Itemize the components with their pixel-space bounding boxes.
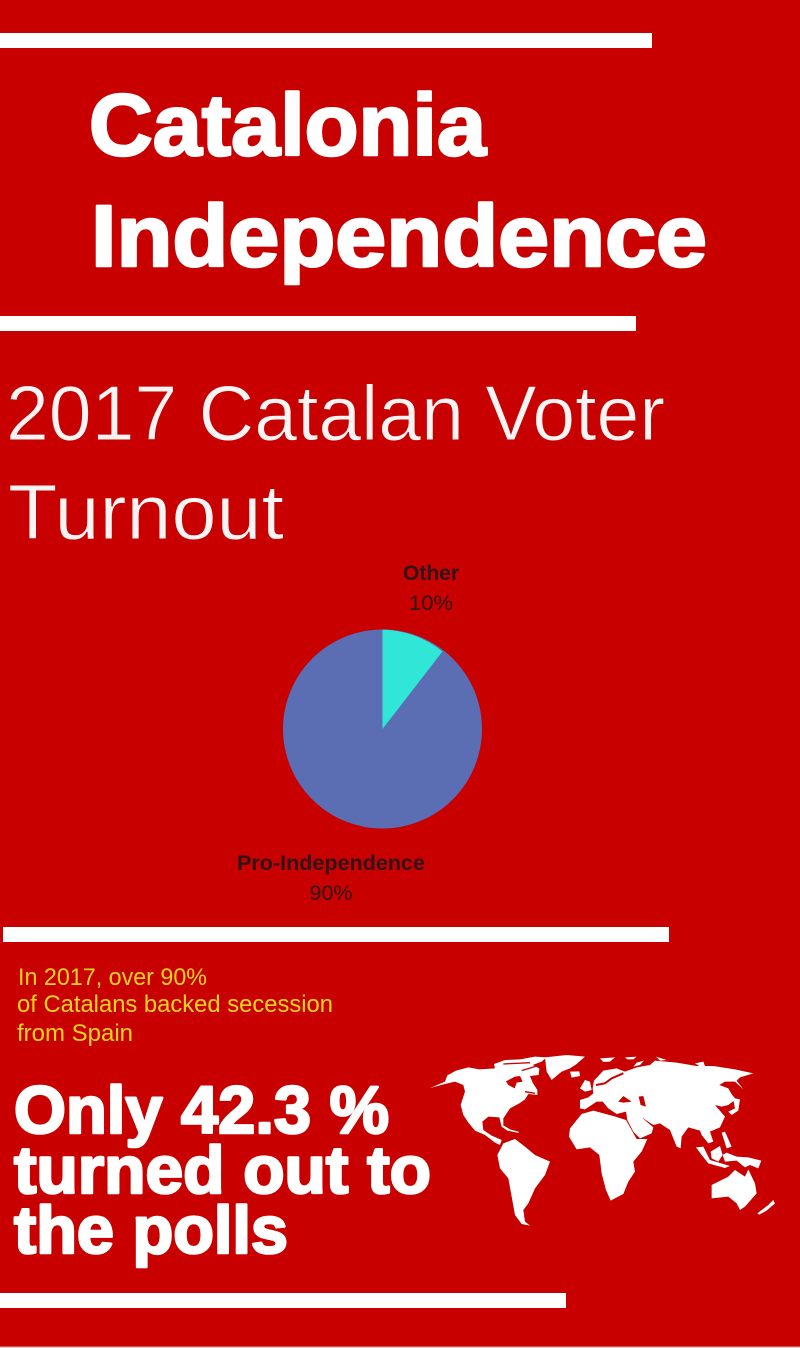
africa [569, 1111, 647, 1201]
turnout callout: turned out to [14, 1133, 431, 1208]
title: Catalonia [89, 77, 487, 174]
borneo [711, 1146, 723, 1162]
pie label: other: Other [403, 561, 460, 585]
arctic islands [600, 1057, 705, 1067]
turnout callout: Only 42.3 % [14, 1073, 389, 1148]
pie label: other [403, 561, 460, 615]
sumatra and java [696, 1147, 730, 1168]
yellow note: of Catalans backed secession [17, 991, 333, 1018]
pie label: pro-independence [237, 851, 425, 905]
yellow note: from Spain [17, 1020, 133, 1047]
pie label: pro-independence: 90% [310, 881, 352, 905]
slice: other 10% [382, 630, 442, 729]
eurasia [580, 1061, 753, 1148]
baltic channel [596, 1073, 623, 1085]
section heading: 2017 Catalan Voter [6, 369, 665, 457]
yellow note [17, 964, 333, 1047]
rule below chart [3, 927, 669, 942]
indonesia and new guinea [723, 1153, 761, 1168]
section heading: Turnout [8, 468, 284, 556]
north america [430, 1057, 547, 1145]
hudson bay cutout [506, 1076, 523, 1088]
pie label: pro-independence: Pro-Independence [237, 851, 425, 875]
philippines and taiwan [722, 1132, 732, 1148]
black sea and caspian cutouts [618, 1096, 646, 1107]
australia [712, 1169, 757, 1210]
british isles [580, 1080, 592, 1092]
canadian arctic channels [503, 1063, 537, 1093]
icon: world map [430, 1055, 775, 1226]
section heading [6, 369, 665, 556]
bottom rule [0, 1293, 566, 1308]
turnout callout: the polls [14, 1193, 288, 1268]
slice: pro-independence 90% [283, 630, 482, 828]
new zealand [757, 1200, 775, 1215]
turnout callout [14, 1073, 431, 1268]
greenland [545, 1055, 585, 1080]
title [89, 77, 707, 285]
rule below title [0, 316, 636, 331]
pie label: other: 10% [409, 591, 453, 615]
japan and sakhalin [728, 1090, 740, 1115]
pie chart [283, 630, 482, 828]
yellow note: In 2017, over 90% [18, 964, 207, 991]
title: Independence [91, 188, 707, 285]
top title rule [0, 33, 652, 48]
south america [497, 1139, 550, 1226]
